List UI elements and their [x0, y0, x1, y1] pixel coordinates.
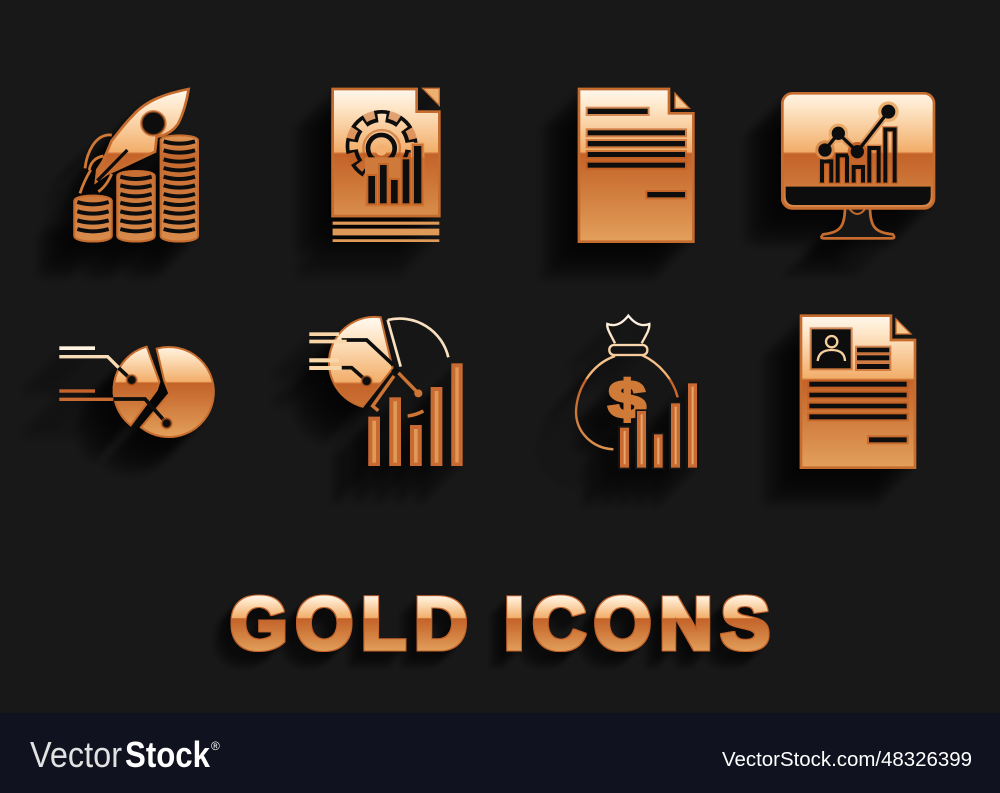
- footer logo: [30, 734, 220, 775]
- footer bar: [0, 713, 1000, 793]
- footer logo: Vector: [30, 734, 122, 775]
- open pie slice: [388, 319, 448, 367]
- icon: pie chart with bar chart: [309, 317, 463, 466]
- icon: monitor with chart: [782, 93, 934, 238]
- coin stack small: [74, 196, 112, 241]
- icon: text document: [579, 89, 693, 242]
- icon: money bag with bars: [576, 316, 697, 468]
- icon: profile document: [801, 316, 915, 468]
- circuit lines: [342, 340, 423, 416]
- speed lines: [309, 332, 347, 370]
- dollar sign: $: [608, 370, 646, 429]
- text lines: [809, 348, 907, 442]
- coin stack tall: [161, 135, 198, 241]
- icon: report page with gear and bars: [333, 88, 439, 242]
- chart bars: [820, 127, 897, 183]
- coin stack medium: [117, 171, 155, 241]
- screen: [782, 93, 934, 208]
- icon: split pie chart with lines: [59, 346, 214, 437]
- footer logo: Stock: [125, 734, 211, 775]
- footer image id: VectorStock.com/48326399: [722, 749, 972, 771]
- bars: [368, 363, 463, 466]
- bars: [620, 383, 697, 468]
- text lines: [588, 109, 685, 197]
- title: GOLD ICONS: [230, 582, 770, 665]
- page: [801, 316, 915, 468]
- speed lines: [59, 346, 119, 401]
- footer lines: [333, 222, 439, 242]
- pie slice: [329, 317, 393, 407]
- icon: rocket over coin stacks: [74, 89, 198, 241]
- pie slices: [114, 347, 214, 437]
- stand: [821, 207, 894, 238]
- folded corner: [675, 93, 689, 108]
- bar highlights: [624, 387, 694, 464]
- gear: [346, 110, 418, 182]
- page: [579, 89, 693, 242]
- circuit lines: [113, 367, 172, 428]
- bars: [365, 143, 424, 207]
- folded corner: [423, 88, 439, 105]
- photo: [812, 329, 851, 368]
- bag outline: [576, 316, 678, 449]
- rocket: [80, 89, 189, 193]
- footer logo: ®: [211, 739, 220, 753]
- trend line: [815, 101, 899, 161]
- lower panel: [786, 187, 931, 205]
- page: [333, 89, 439, 216]
- folded corner: [896, 319, 911, 334]
